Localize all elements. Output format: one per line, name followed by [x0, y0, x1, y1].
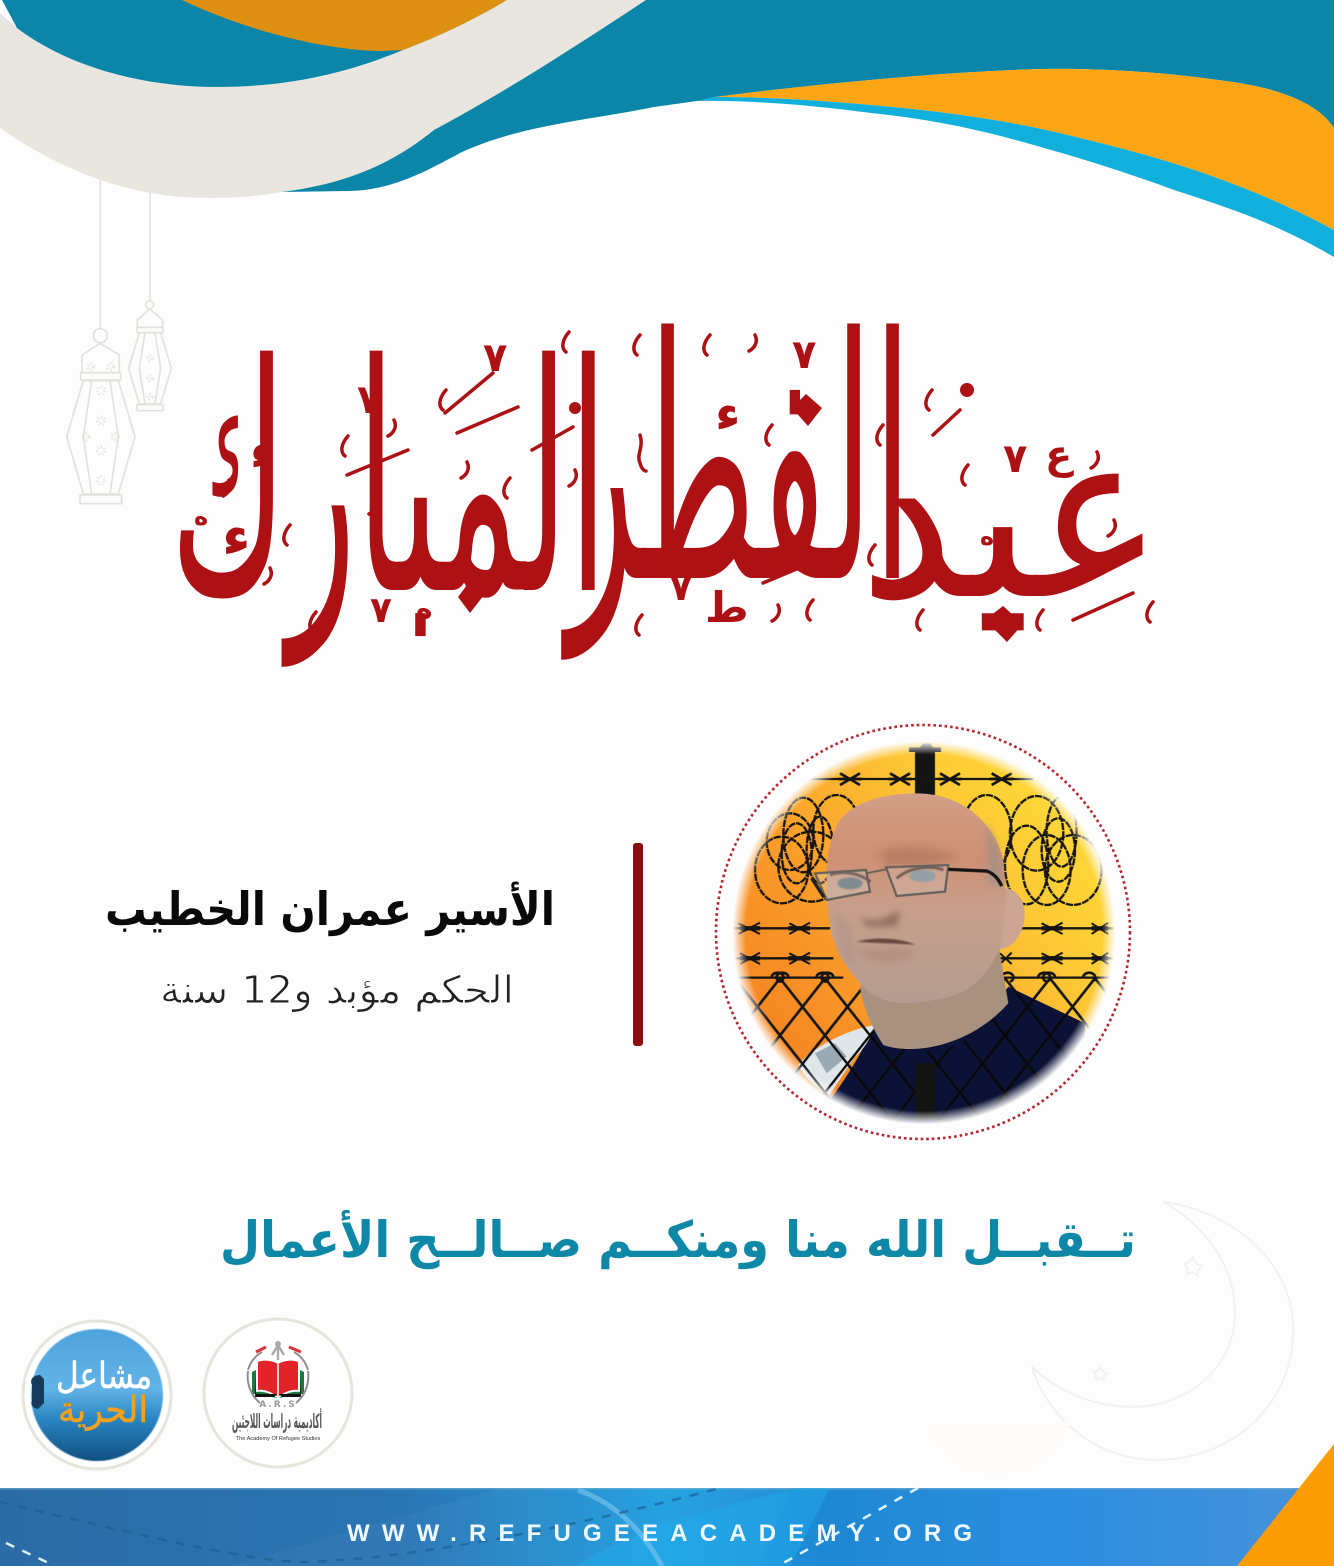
- logo: Mashael al-Hurriya: [23, 1321, 171, 1469]
- decorative crescent and stars: [927, 1202, 1293, 1475]
- top wave banner: [0, 0, 1334, 257]
- fence post: [909, 743, 941, 795]
- footer band: [0, 1444, 1334, 1566]
- logo: Mashael al-Hurriya: مشاعل: [56, 1356, 152, 1397]
- portrait: prisoner photo illustration: [733, 742, 1115, 1124]
- icon: hanging lanterns: [67, 180, 171, 504]
- logo: Mashael al-Hurriya: الحرية: [58, 1390, 148, 1431]
- title: Eid al-Fitr calligraphy: المبارك: [170, 299, 608, 669]
- title ornaments: small letter marks: ء: [222, 504, 251, 569]
- photo background gradient: [733, 742, 1115, 1098]
- head: [827, 793, 1006, 1003]
- shirt: [827, 987, 1085, 1133]
- footer website: WWW.REFUGEEACADEMY.ORG: [347, 1520, 972, 1547]
- razor wire coils: [755, 795, 1102, 905]
- title ornaments: small letter marks: ء: [250, 424, 275, 480]
- portrait frame: dotted circle: [716, 725, 1130, 1139]
- neck: [860, 943, 1008, 1049]
- book emblem: [258, 1361, 298, 1397]
- chain-link over shirt: [798, 990, 1085, 1122]
- shirt shoulder stripes: [798, 1025, 875, 1097]
- title word: eid: عيد: [859, 379, 1164, 652]
- face shadows: [833, 823, 1002, 970]
- vertical divider: [633, 843, 643, 1046]
- logo: Academy of Refugee Studies: [204, 1319, 352, 1467]
- title ornaments: small letter marks: ء: [715, 384, 741, 442]
- title ornaments: small letter marks: ع: [1045, 432, 1074, 478]
- faint pink half circle: [927, 1422, 1070, 1475]
- title ornaments: small diacritic marks: [206, 332, 1153, 635]
- title ornaments: small letter marks: [194, 332, 1074, 642]
- logo: Academy of Refugee Studies: The Academy Of Refugee Studies: [236, 1436, 320, 1442]
- title ornaments: small letter marks: ه: [416, 592, 433, 625]
- title ornaments: small letter marks: ٧: [792, 332, 816, 378]
- logo: Academy of Refugee Studies: A.R.S: [259, 1400, 297, 1410]
- title ornaments: small letter marks: ٧: [670, 568, 692, 609]
- title ornaments: small letter marks: ٧: [483, 335, 507, 381]
- title ornaments: small letter marks: ٧: [370, 590, 392, 631]
- dashed lines: [6, 1488, 918, 1566]
- title ornaments: small letter marks: ٧: [1003, 436, 1027, 482]
- title ornaments: small letter marks: ٧: [357, 377, 381, 423]
- text: أكاديمية دراسات اللاجئين: [232, 1407, 322, 1433]
- glasses: [812, 865, 1002, 900]
- eyes: [830, 867, 943, 889]
- title ornaments: small letter marks: ه: [980, 523, 994, 551]
- collar shadow: [915, 1063, 936, 1120]
- closing greeting: تــقبــل الله منا ومنكــم صــالــح الأعمال: [220, 1209, 1136, 1270]
- sentence text: الحكم مؤبد و12 سنة: [160, 968, 514, 1013]
- orange corner: [1237, 1444, 1334, 1566]
- ear: [999, 888, 1025, 950]
- mouth: [857, 939, 916, 945]
- chain-link fence, rear part: [740, 971, 1106, 1098]
- title ornaments: small letter marks: ه: [194, 503, 208, 531]
- prisoner name: الأسير عمران الخطيب: [105, 881, 555, 936]
- barbed wire lines: [733, 773, 1113, 978]
- title ornaments: small letter marks: ط: [705, 583, 749, 632]
